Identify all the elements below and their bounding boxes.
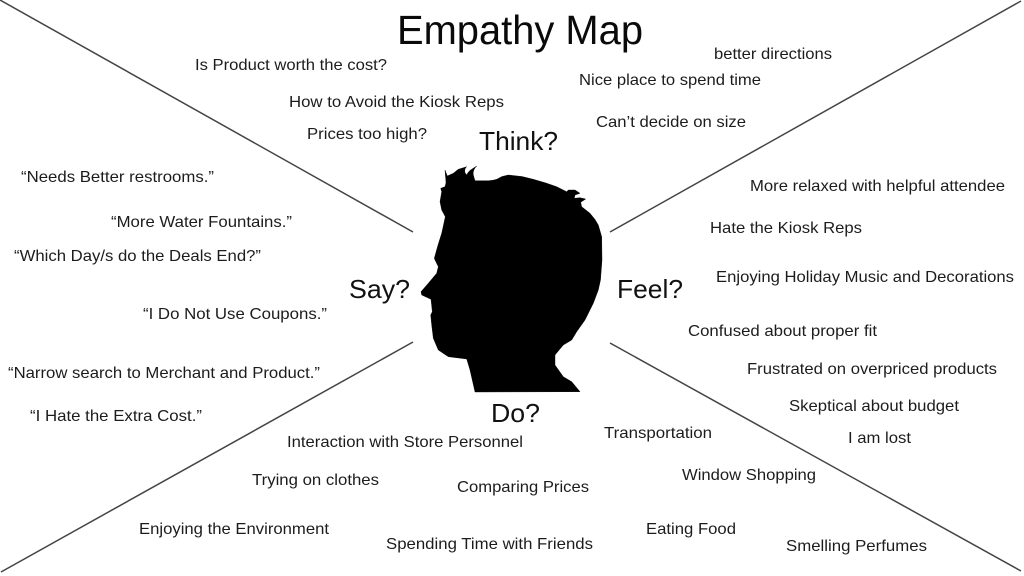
text block: say items <box>8 169 327 425</box>
text block: think items: How to Avoid the Kiosk Reps <box>289 94 504 111</box>
text block: do items: Smelling Perfumes <box>786 538 927 555</box>
text block: feel items: Skeptical about budget <box>789 398 960 415</box>
text block: do items: Trying on clothes <box>252 472 379 489</box>
text block: say items: “I Do Not Use Coupons.” <box>143 306 327 323</box>
text block: say items: “Needs Better restrooms.” <box>21 169 214 186</box>
text block: do items: Enjoying the Environment <box>139 521 330 538</box>
heading: Think?: Think? <box>479 126 558 156</box>
text block: do items: Comparing Prices <box>457 479 589 496</box>
text block: feel items <box>688 178 1014 447</box>
icon: head silhouette <box>421 166 602 392</box>
text block: feel items: Enjoying Holiday Music and Decorations <box>716 269 1014 286</box>
text block: feel items: I am lost <box>848 430 912 447</box>
text block: do items: Spending Time with Friends <box>386 536 593 553</box>
title: Empathy Map <box>397 7 643 53</box>
text block: say items: “Which Day/s do the Deals End?” <box>14 248 261 265</box>
heading: Feel?: Feel? <box>617 274 683 304</box>
text block: do items: Transportation <box>604 425 712 442</box>
text block: say items: “I Hate the Extra Cost.” <box>30 408 202 425</box>
text block: think items: better directions <box>714 46 832 63</box>
text block: do items: Interaction with Store Personnel <box>287 434 523 451</box>
text block: think items: Nice place to spend time <box>579 72 761 89</box>
text block: feel items: More relaxed with helpful attendee <box>750 178 1005 195</box>
text block: think items <box>195 46 832 143</box>
text block: feel items: Hate the Kiosk Reps <box>710 220 862 237</box>
heading: Do?: Do? <box>491 398 540 428</box>
text block: feel items: Confused about proper fit <box>688 323 878 340</box>
text block: say items: “More Water Fountains.” <box>111 214 292 231</box>
text block: do items <box>139 425 927 555</box>
text block: think items: Prices too high? <box>307 126 427 143</box>
text block: do items: Eating Food <box>646 521 736 538</box>
heading: Say?: Say? <box>349 274 410 304</box>
text block: think items: Is Product worth the cost? <box>195 57 387 74</box>
text block: say items: “Narrow search to Merchant and Product.” <box>8 365 320 382</box>
text block: feel items: Frustrated on overpriced products <box>747 361 997 378</box>
text block: think items: Can’t decide on size <box>596 114 746 131</box>
text block: do items: Window Shopping <box>682 467 816 484</box>
